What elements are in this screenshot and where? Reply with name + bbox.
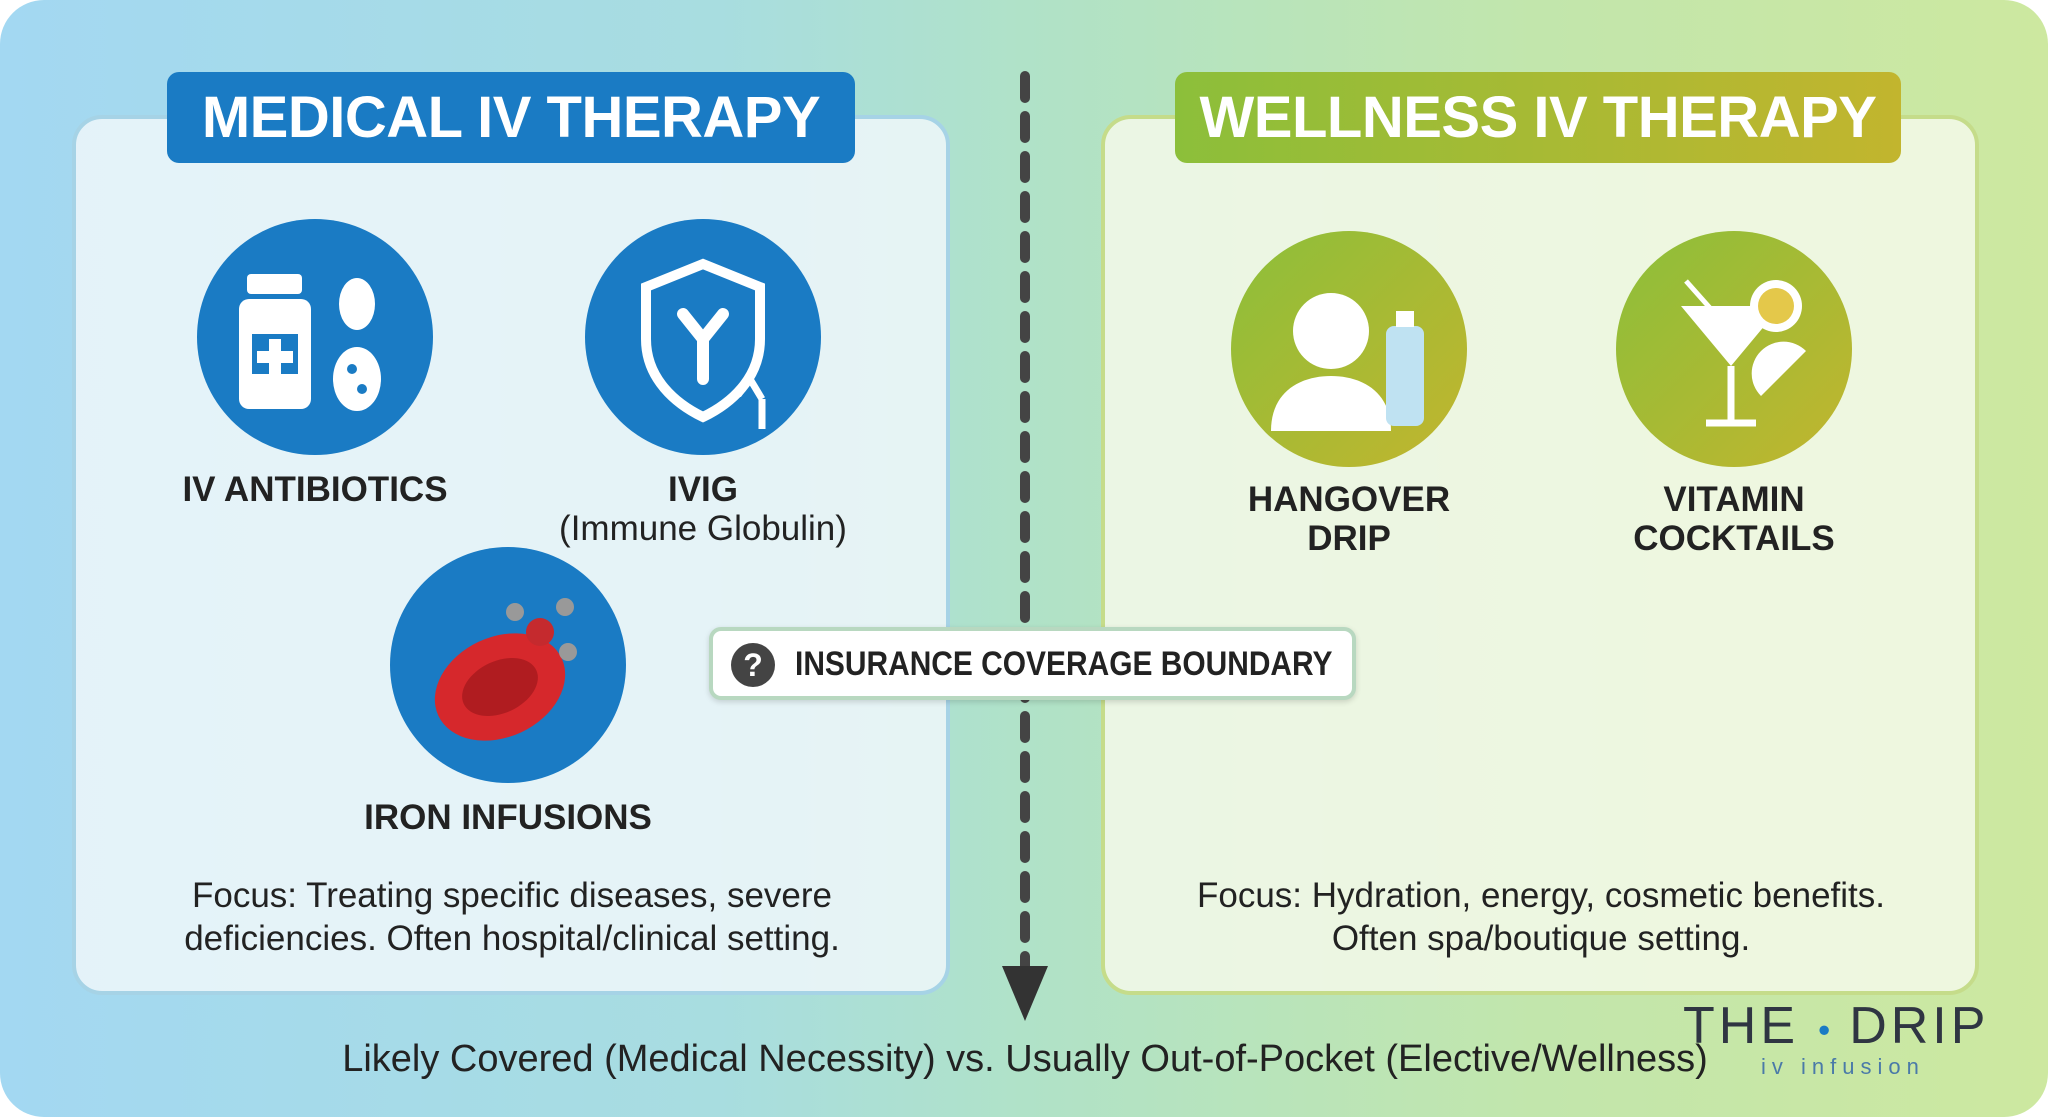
icon: IVIG — [585, 219, 821, 455]
callout: insurance boundary: INSURANCE COVERAGE BOUNDARY — [795, 645, 1333, 683]
panel: wellness — [1101, 115, 1979, 995]
label: hangover drip — [1248, 480, 1450, 558]
label: IV antibiotics: IV ANTIBIOTICS — [182, 470, 448, 509]
arrow: dashed divider — [1002, 71, 1048, 1021]
label: IVIG: (Immune Globulin) — [559, 509, 847, 548]
label: vitamin cocktails: VITAMIN — [1663, 480, 1805, 519]
label: hangover drip: HANGOVER — [1248, 480, 1450, 519]
label: IVIG — [559, 470, 847, 548]
label: iron infusions: IRON INFUSIONS — [364, 798, 652, 837]
logo: iv infusion — [1761, 1054, 1925, 1079]
text: bottom caption: Likely Covered (Medical Necessity) vs. Usually Out-of-Pocket (Elective/Wellness) — [342, 1038, 1708, 1080]
text: wellness focus — [1197, 876, 1885, 958]
label: vitamin cocktails: COCKTAILS — [1633, 519, 1835, 558]
heading: medical: MEDICAL IV THERAPY — [202, 85, 820, 150]
label: IVIG: IVIG — [668, 470, 738, 509]
icon: hangover — [1231, 231, 1467, 467]
text: wellness focus: Often spa/boutique setting. — [1332, 919, 1750, 958]
label: hangover drip: DRIP — [1307, 519, 1391, 558]
icon: iron — [390, 547, 626, 783]
text: medical focus — [184, 876, 840, 958]
text: medical focus: Focus: Treating specific diseases, severe — [192, 876, 832, 915]
text: medical focus: deficiencies. Often hospital/clinical setting. — [184, 919, 840, 958]
panel: medical — [72, 115, 950, 995]
heading: wellness: WELLNESS IV THERAPY — [1200, 85, 1876, 150]
logo: THE ● DRIP — [1683, 997, 1989, 1055]
icon: IV antibiotics — [197, 219, 433, 455]
label: vitamin cocktails — [1633, 480, 1835, 558]
heading: medical — [167, 72, 855, 163]
icon: question: ? — [743, 647, 763, 683]
icon: question — [731, 643, 775, 687]
text: wellness focus: Focus: Hydration, energy, cosmetic benefits. — [1197, 876, 1885, 915]
callout: insurance boundary — [709, 627, 1356, 700]
heading: wellness — [1175, 72, 1901, 163]
icon: cocktail — [1616, 231, 1852, 467]
